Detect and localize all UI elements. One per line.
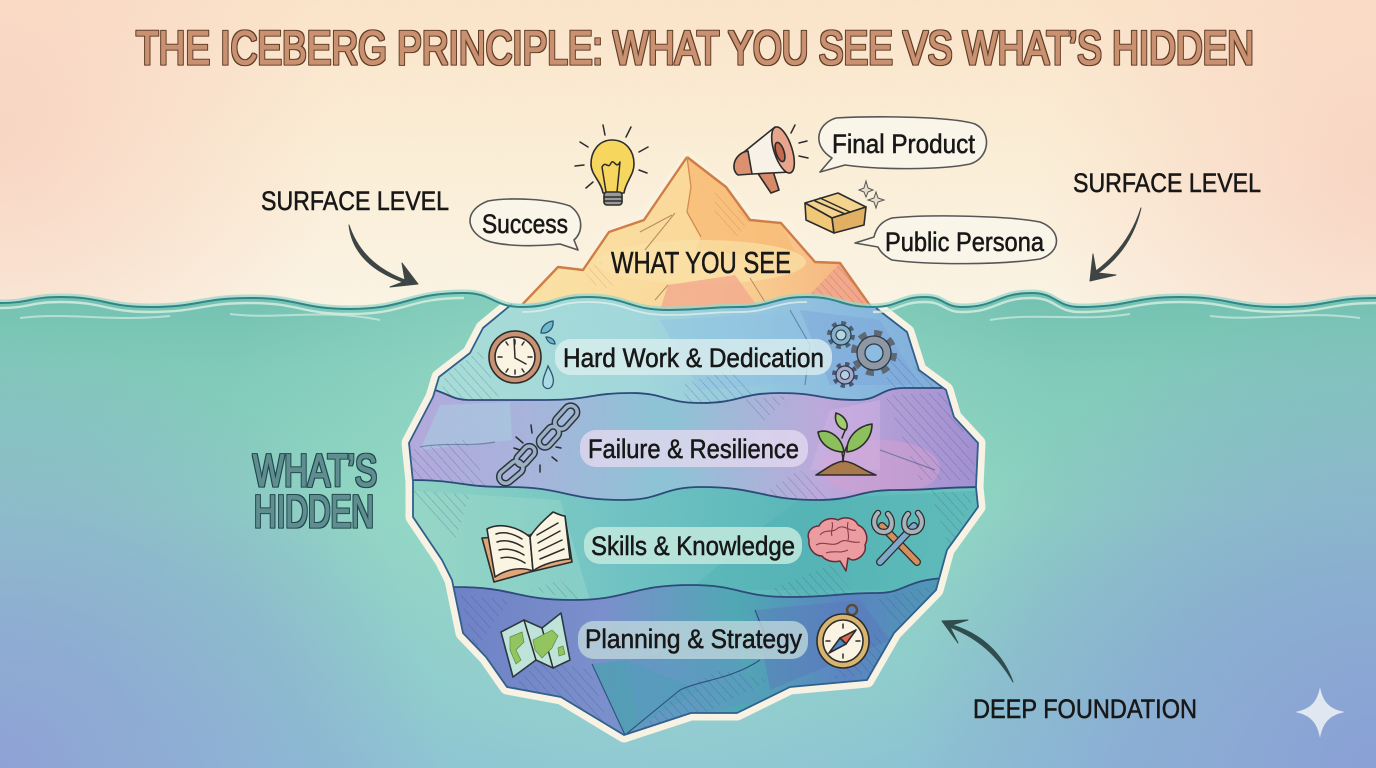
callout: public persona: Public Persona xyxy=(885,227,1045,257)
callout: final product xyxy=(819,117,986,172)
callout: success: Success xyxy=(482,209,568,239)
icon: broken chain xyxy=(497,403,580,486)
layer boundaries xyxy=(400,385,990,600)
icon: folded map xyxy=(501,613,570,677)
layer: failure and resilience xyxy=(497,403,876,486)
callout: final product: Final Product xyxy=(832,129,975,159)
pill xyxy=(578,621,808,659)
layer: skills and knowledge xyxy=(482,512,922,582)
layer: hard work and dedication xyxy=(489,321,894,389)
callout: public persona xyxy=(855,216,1056,264)
label: deep foundation: DEEP FOUNDATION xyxy=(973,694,1197,724)
icon: crossed wrench and spanner xyxy=(874,513,922,562)
icon: sprout xyxy=(816,413,876,475)
icon: open book xyxy=(482,512,572,582)
layers xyxy=(400,290,990,745)
water xyxy=(0,290,1376,768)
label: Failure & Resilience xyxy=(588,434,799,464)
icon: package box xyxy=(805,181,884,233)
waterline xyxy=(0,291,1376,315)
layer 3 fill xyxy=(414,481,977,600)
label: what's hidden: HIDDEN xyxy=(254,486,374,537)
callout: success xyxy=(470,199,581,250)
layer 1 fill xyxy=(436,298,941,402)
icon: gears xyxy=(829,323,894,386)
pill xyxy=(555,339,832,375)
arrow: surface level right xyxy=(1090,208,1141,281)
label: Planning & Strategy xyxy=(585,624,802,654)
label: what's hidden: WHAT’S xyxy=(253,445,377,496)
label: Hard Work & Dedication xyxy=(563,343,824,373)
iceberg body below water xyxy=(400,290,990,745)
icon: compass xyxy=(817,605,869,668)
sticker outline xyxy=(409,297,978,735)
label: surface level right: SURFACE LEVEL xyxy=(1073,168,1261,198)
label: what you see: WHAT YOU SEE xyxy=(611,245,791,280)
pill xyxy=(580,430,808,467)
arrow: deep foundation xyxy=(942,620,1013,682)
iceberg tip above water xyxy=(512,150,880,310)
crack lines xyxy=(420,310,935,470)
label: surface level left: SURFACE LEVEL xyxy=(261,186,449,216)
icon: sparkle star xyxy=(1295,687,1345,738)
label: Skills & Knowledge xyxy=(591,531,795,561)
body ink edge xyxy=(409,304,978,735)
icon: light bulb xyxy=(575,125,648,205)
label: what's hidden xyxy=(253,445,377,537)
icon: brain xyxy=(808,518,867,571)
pill xyxy=(584,527,802,564)
icon: megaphone xyxy=(734,124,808,193)
layer: planning and strategy xyxy=(501,605,869,677)
layer 4 fill xyxy=(454,580,938,734)
icon: clock xyxy=(489,331,541,383)
icon: sweat drops xyxy=(541,321,555,389)
sky background xyxy=(0,0,1376,320)
arrow: surface level left xyxy=(349,225,418,287)
layer 2 fill xyxy=(410,388,978,500)
